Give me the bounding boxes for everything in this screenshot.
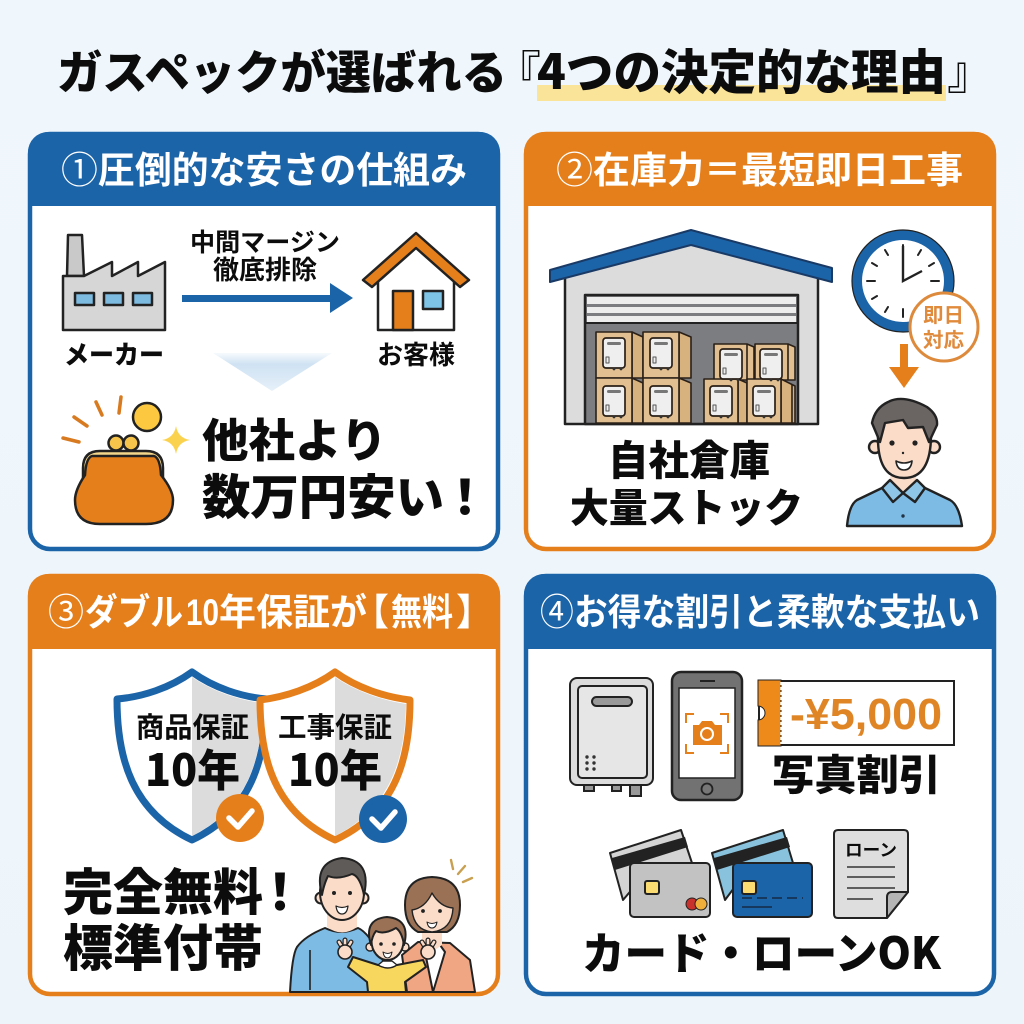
heading: panel 3: 10	[186, 592, 219, 633]
heading: panel 3: 無料	[391, 592, 453, 633]
label: customer: お客様	[377, 335, 455, 372]
panel: 3 double 10 year warranty	[28, 574, 500, 994]
icon: man	[847, 399, 962, 526]
icon: discount ticket: -¥5,000	[790, 690, 942, 739]
text: completely free standard: ！	[255, 853, 305, 925]
icon: credit cards blue	[712, 830, 812, 917]
label: maker: メーカー	[64, 335, 164, 372]
title: 『	[495, 37, 541, 103]
text: photo discount: 写真割引	[772, 742, 941, 803]
icon: family	[290, 858, 475, 992]
text: card and loan OK: カード・ローンOK	[582, 918, 942, 982]
heading: panel 3: ③	[48, 592, 84, 633]
icon: loan document: ローン	[845, 836, 897, 861]
title: 4つの決定的な理由	[537, 33, 946, 103]
icon: product warranty shield: 商品保証	[136, 706, 249, 746]
icon: loan document	[834, 830, 908, 918]
text: completely free standard: 完全無料	[63, 853, 263, 925]
icon: smartphone with camera	[672, 672, 742, 800]
text: own warehouse large stock	[570, 427, 803, 534]
text: completely free standard: 標準付帯	[63, 909, 263, 981]
icon: installation warranty shield: 10年	[288, 735, 382, 799]
icon: discount ticket	[758, 680, 954, 746]
title	[57, 33, 993, 103]
text: completely free standard	[63, 853, 305, 981]
father	[290, 858, 385, 992]
text: cut margin	[190, 223, 340, 287]
icon: clock	[852, 230, 954, 332]
boxes of water heaters	[596, 332, 795, 423]
child	[338, 917, 435, 992]
icon: warehouse	[550, 230, 832, 424]
text: cut margin: 中間マージン	[190, 223, 340, 259]
badge: same-day	[910, 293, 978, 361]
badge: same-day: 即日	[923, 299, 964, 328]
text: cheaper than others: 他社より	[202, 405, 387, 471]
text: cheaper than others: 数万円安い	[202, 458, 444, 528]
icon: product warranty shield: 10年	[145, 735, 240, 799]
text: own warehouse large stock: 自社倉庫	[608, 427, 770, 487]
text: own warehouse large stock: 大量ストック	[570, 476, 803, 534]
mother	[402, 877, 475, 992]
icon: installation warranty shield	[260, 672, 410, 843]
title: ガスペックが選ばれる	[57, 37, 507, 103]
text: cheaper than others: ！	[441, 458, 489, 528]
badge: same-day: 対応	[923, 324, 964, 353]
panel: 4 discount and flexible payment	[524, 574, 996, 994]
panel: 1 cheap price mechanism	[28, 132, 500, 549]
icon: installation warranty shield: 工事保証	[278, 706, 392, 746]
icon: factory	[63, 235, 165, 330]
heading: panel 3: 年保証が	[219, 592, 367, 633]
heading: panel 1: ①圧倒的な安さの仕組み	[61, 150, 467, 191]
heading: panel 3: 【	[352, 592, 389, 633]
heading: panel 4: ④お得な割引と柔軟な支払い	[540, 592, 980, 633]
arrow: down to customer	[889, 344, 919, 388]
heading: panel 3: ダブル	[85, 591, 183, 633]
title: 』	[947, 37, 993, 103]
icon: product warranty shield	[117, 672, 267, 842]
panel: 2 stock and same-day work	[524, 132, 996, 549]
icon: water heater	[570, 678, 653, 796]
text: cheaper than others	[202, 405, 489, 528]
arrow: maker to customer	[182, 283, 353, 313]
heading: panel 2: ②在庫力＝最短即日工事	[556, 150, 963, 191]
heading: panel 3	[48, 591, 493, 633]
heading: panel 3: 】	[456, 592, 493, 633]
icon: coin purse	[63, 397, 190, 524]
arrow: result triangle	[213, 353, 332, 391]
icon: house	[363, 233, 469, 330]
icon: credit cards grey	[610, 830, 710, 917]
text: cut margin: 徹底排除	[213, 250, 317, 287]
